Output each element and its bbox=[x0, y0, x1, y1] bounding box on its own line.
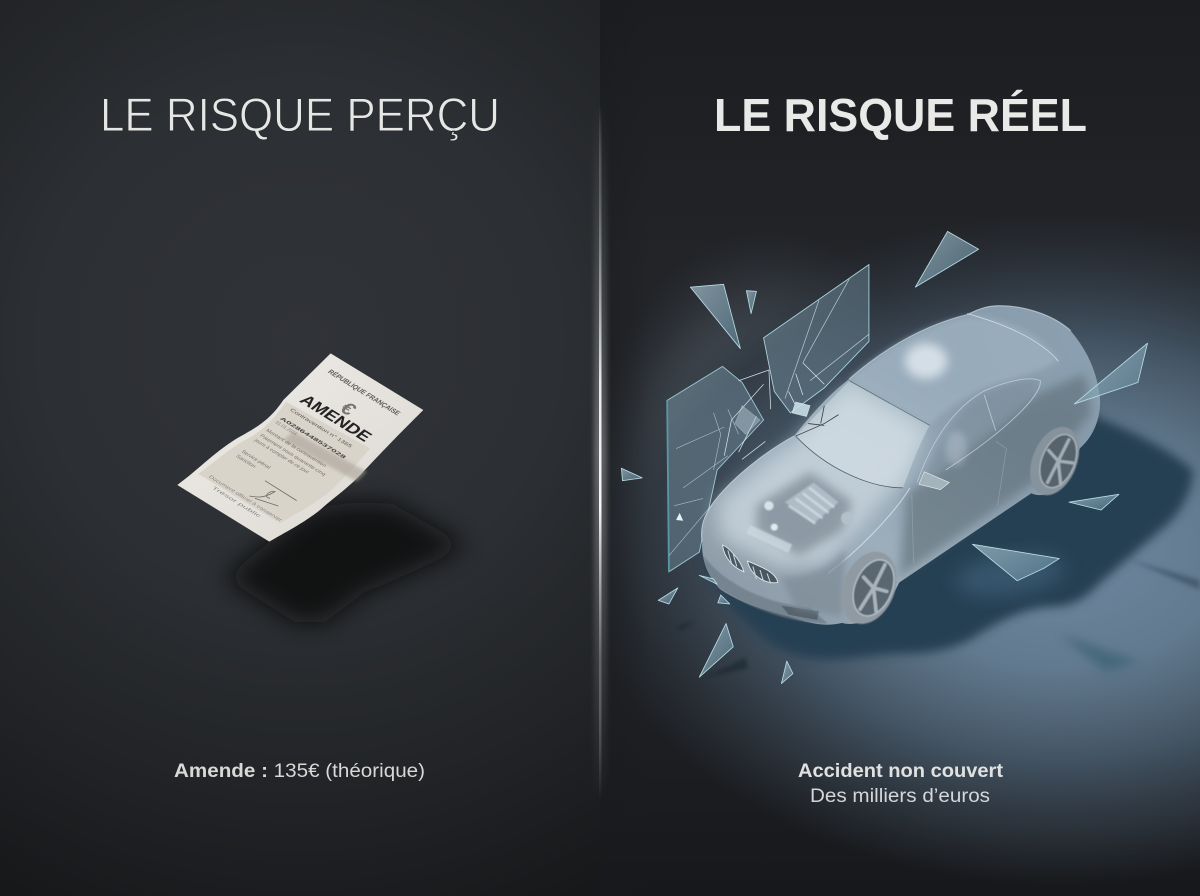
panel: right background bbox=[600, 0, 1200, 896]
shard bottom left small bbox=[658, 588, 678, 604]
car hood glow bbox=[717, 388, 924, 566]
shard right low bbox=[1069, 494, 1119, 510]
lower front shade bbox=[781, 549, 846, 616]
icon: amende paper bbox=[177, 353, 423, 542]
signature bbox=[249, 481, 297, 506]
bonnet line bbox=[828, 488, 910, 574]
roof highlight bbox=[905, 343, 947, 379]
side body shading bbox=[899, 374, 1092, 577]
paper detail lines: Service pénal bbox=[240, 449, 272, 470]
paper shadow bbox=[225, 503, 465, 622]
windshield outline bbox=[796, 381, 930, 488]
paper detail lines: Sanction bbox=[234, 454, 257, 469]
rear wheel bbox=[1021, 420, 1089, 502]
paper detail lines: Montant de la contravention bbox=[264, 428, 328, 469]
shard bottom bbox=[781, 661, 793, 684]
car outline bbox=[702, 306, 1100, 625]
car body bbox=[702, 306, 1100, 632]
engine bbox=[746, 472, 854, 556]
paper detail lines: A0286448537028 bbox=[278, 416, 347, 460]
paper detail lines: Contravention n° 1365 bbox=[288, 408, 353, 449]
front wheel bbox=[831, 543, 907, 632]
car outline rim bbox=[702, 306, 1071, 541]
bumper bbox=[704, 556, 828, 624]
window frame bbox=[917, 379, 1040, 482]
shard debris bbox=[699, 575, 717, 584]
floor shadow beneath car bbox=[700, 400, 1200, 672]
caption: accident: Accident non couvert bbox=[798, 761, 1004, 782]
shard top left bbox=[690, 284, 740, 349]
shard under car bbox=[972, 544, 1059, 581]
paper detail lines: Trésor public bbox=[210, 486, 263, 519]
floor light streak bbox=[1130, 560, 1200, 590]
shard far left bbox=[621, 468, 642, 481]
paper inner panel bbox=[198, 402, 370, 523]
euro symbol: € bbox=[335, 399, 361, 419]
shard right bbox=[1074, 343, 1147, 404]
door outline bbox=[912, 441, 1006, 563]
shard bottom left bbox=[699, 624, 733, 677]
floor patch in shadow bbox=[953, 548, 1067, 602]
paper fold shading bbox=[283, 432, 367, 482]
glass pane left bbox=[667, 366, 764, 572]
paper detail lines: Document officiel à conserver bbox=[207, 475, 283, 523]
shard debris small bbox=[718, 595, 730, 604]
paper detail lines: jours à compter de ce jour bbox=[252, 438, 311, 475]
glass pane upper bbox=[764, 265, 869, 413]
paper detail lines: 01.01.2024 bbox=[273, 420, 298, 437]
trunk line bbox=[967, 314, 1058, 361]
shard ground shadows bbox=[676, 620, 747, 677]
paper title: AMENDE bbox=[296, 392, 376, 445]
glass impact cracks bbox=[724, 363, 824, 459]
shard small top bbox=[746, 291, 756, 314]
floor reflection bbox=[1060, 634, 1140, 672]
heading: le risque réel: LE RISQUE RÉEL bbox=[714, 89, 1087, 141]
side windows bbox=[924, 380, 1037, 477]
windshield bbox=[796, 381, 930, 488]
paper detail lines: Paiement sous quarante-cinq bbox=[258, 434, 327, 477]
shard top bbox=[915, 231, 979, 287]
panel: left background bbox=[0, 0, 600, 896]
heading: le risque perçu: LE RISQUE PERÇU bbox=[100, 88, 500, 141]
paper text bbox=[199, 368, 406, 528]
windshield cracks bbox=[796, 406, 839, 436]
paper detail lines bbox=[201, 407, 363, 528]
bumper intake bbox=[781, 606, 819, 620]
roof bbox=[849, 316, 1058, 425]
mirror bbox=[919, 472, 949, 490]
paper header: RÉPUBLIQUE FRANÇAISE bbox=[326, 368, 403, 417]
caption: milliers d'euros: Des milliers d’euros bbox=[810, 786, 990, 807]
caption: amende: Amende : 135€ (théorique) bbox=[174, 761, 425, 782]
seats bbox=[859, 431, 967, 487]
divider bbox=[594, 105, 607, 800]
car illustration bbox=[621, 231, 1147, 684]
glass shards bbox=[621, 231, 1147, 684]
grille bbox=[722, 545, 778, 584]
